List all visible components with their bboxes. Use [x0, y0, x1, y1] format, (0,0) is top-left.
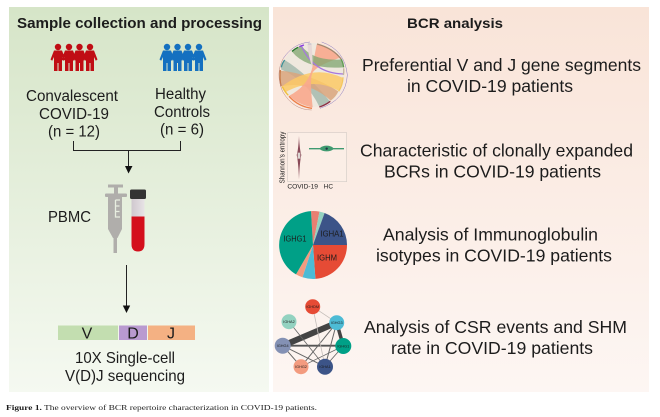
V(D)J segment bar: V: [82, 326, 93, 342]
heading: BCR analysis: BCR analysis: [407, 16, 503, 31]
violin: COVID-19: [297, 136, 301, 179]
pie labels: IGHM: [317, 254, 337, 262]
axis label: Shannon's entropy: Shannon's entropy: [280, 131, 287, 183]
text: CSR events and SHM: Analysis of CSR events and SHM: [364, 317, 627, 337]
pie labels: IGHA1: [320, 230, 344, 238]
panel: BCR analysis: [273, 7, 649, 392]
network nodes: IGHDM: [306, 305, 319, 309]
text: V and J gene segments: Preferential V and J gene segments: [362, 55, 641, 75]
text: clonally expanded BCRs: BCRs in COVID-19 patients: [384, 162, 601, 182]
text: sequencing method: 10X Single-cell: [75, 350, 175, 367]
text: CSR events and SHM: [364, 317, 627, 358]
network nodes: IGHA2: [283, 320, 295, 324]
panel: sample collection and processing: [9, 7, 269, 392]
axis tick labels: HC: [324, 184, 333, 191]
network nodes: IGHG2: [295, 365, 307, 369]
chart: immunoglobulin isotype pie: [279, 211, 347, 279]
text: immunoglobulin isotypes: Analysis of Immunoglobulin: [383, 224, 598, 244]
pie labels: [284, 230, 344, 262]
text: convalescent cohort: (n = 12): [48, 124, 100, 140]
text: immunoglobulin isotypes: [376, 224, 612, 266]
heading: sample collection: Sample collection and processing: [17, 15, 262, 32]
text: convalescent cohort: COVID-19: [39, 106, 109, 123]
chart: CSR network: [275, 299, 351, 375]
chart: chord diagram: [279, 42, 347, 110]
icon: syringe: [105, 184, 127, 253]
network nodes: IGHG1: [337, 344, 349, 348]
arrow: PBMC to sequencing: [123, 265, 130, 313]
network nodes: [275, 299, 351, 375]
text: healthy cohort: Healthy: [155, 86, 206, 103]
chart: Shannon's entropy violin plot: [280, 131, 347, 191]
text: CSR events and SHM: rate in COVID-19 patients: [391, 338, 593, 358]
icon: healthy controls group: [160, 44, 206, 71]
text: healthy cohort: [154, 86, 210, 138]
text: convalescent cohort: Convalescent: [26, 88, 119, 105]
text: healthy cohort: Controls: [154, 104, 210, 121]
text: sequencing method: [65, 350, 185, 385]
V(D)J segment bar: [58, 326, 195, 342]
V(D)J segment bar: D: [127, 326, 139, 342]
icon: blood tube: [130, 190, 146, 252]
text: healthy cohort: (n = 6): [160, 122, 204, 138]
text: clonally expanded BCRs: [360, 140, 633, 182]
label: PBMC: PBMC: [48, 209, 91, 226]
V(D)J segment bar: J: [167, 326, 175, 342]
arrow: cohorts merge into PBMC step: [74, 141, 180, 174]
violin: HC: [309, 146, 344, 151]
text: sequencing method: V(D)J sequencing: [65, 368, 185, 385]
axis tick labels: COVID-19: [287, 184, 318, 191]
text: convalescent cohort: [26, 88, 119, 140]
text: V and J gene segments: in COVID-19 patients: [407, 76, 573, 96]
text: immunoglobulin isotypes: isotypes in COVID-19 patients: [376, 246, 612, 266]
network nodes: IGHA1: [319, 365, 331, 369]
icon: convalescent patients group: [50, 44, 98, 71]
text: clonally expanded BCRs: Characteristic of clonally expanded: [360, 140, 633, 160]
pie labels: IGHG1: [284, 234, 307, 244]
axis tick labels: [287, 184, 333, 191]
network nodes: IGHG4: [277, 344, 289, 348]
text: V and J gene segments: [362, 55, 641, 96]
figure caption: Figure 1. The overview of BCR repertoire characterization in COVID-19 patients.: [6, 403, 317, 412]
network nodes: IGHG3: [331, 321, 343, 325]
